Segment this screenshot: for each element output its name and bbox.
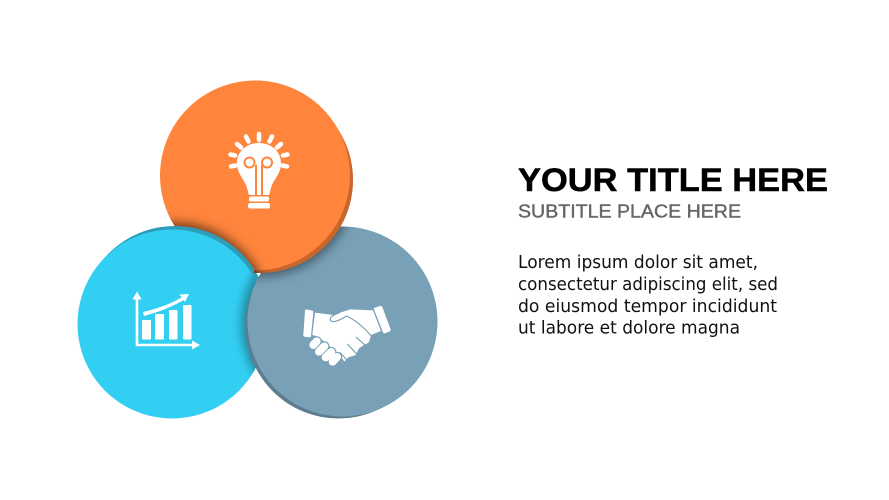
body text: ut labore et dolore magna <box>518 318 740 338</box>
shadow: gray circle onto blue <box>234 270 256 376</box>
panel: orange circle (base layer) <box>160 80 353 273</box>
title: YOUR TITLE HERE <box>518 162 828 198</box>
icon: growth chart <box>132 292 200 350</box>
shadow: orange circle onto gray <box>256 226 351 283</box>
body text: Lorem ipsum dolor sit amet, <box>518 253 758 273</box>
body text: do eiusmod tempor incididunt <box>518 297 777 317</box>
icon: handshake <box>303 306 391 362</box>
shadow: blue circle onto orange <box>169 215 258 273</box>
icon: light bulb <box>230 134 288 208</box>
subtitle: SUBTITLE PLACE HERE <box>518 202 741 222</box>
panel: blue circle <box>78 226 269 418</box>
body text <box>518 253 778 338</box>
panel: orange circle overlap over gray <box>254 80 353 273</box>
panel: gray circle <box>246 226 438 418</box>
infographic canvas <box>78 80 827 418</box>
body text: consectetur adipiscing elit, sed <box>518 275 778 295</box>
